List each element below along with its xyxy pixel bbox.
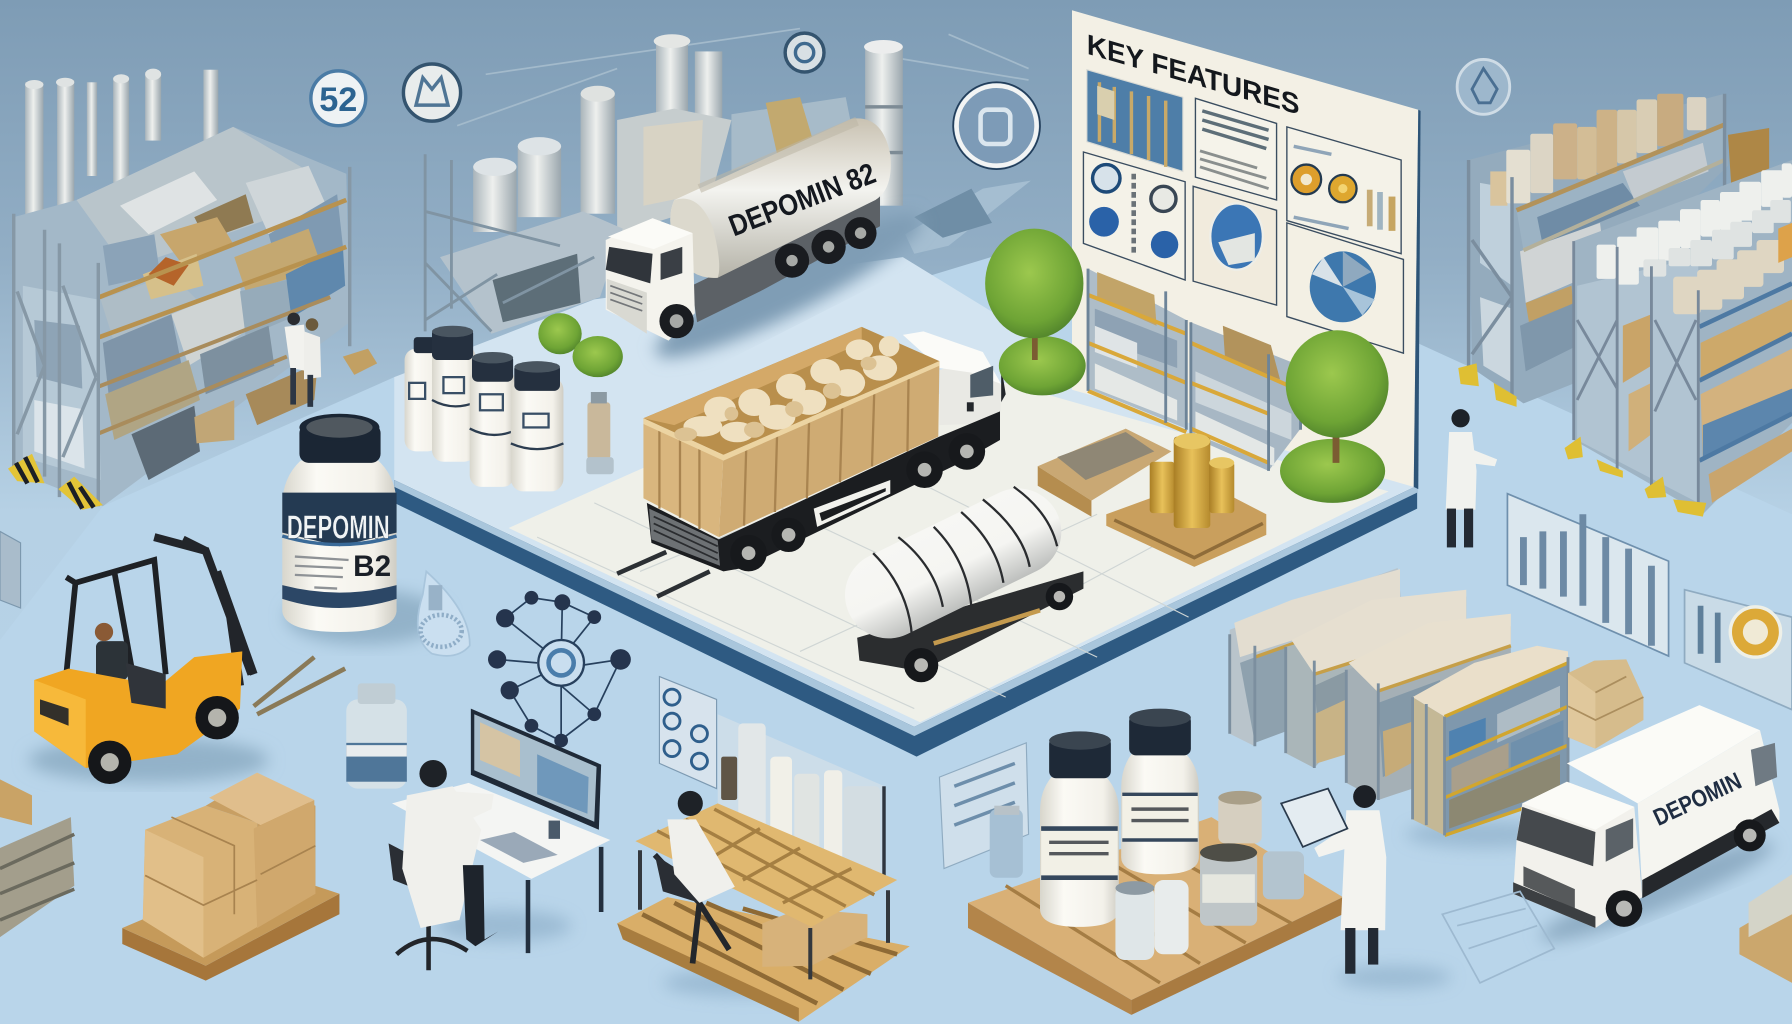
cage	[66, 560, 166, 686]
billboard heading: KEY FEATURES	[1087, 29, 1299, 122]
floor pallet	[617, 897, 910, 1022]
badge: emblem left	[403, 64, 461, 121]
shelf unit right	[1191, 322, 1301, 471]
bottle	[432, 326, 475, 462]
pallet	[968, 817, 1343, 1015]
truck cab	[903, 331, 1006, 425]
glass side panel with icons	[659, 677, 717, 789]
pallet	[122, 869, 339, 981]
small glass jar	[346, 683, 407, 789]
storage shelves	[1088, 269, 1301, 471]
workstation desk	[389, 709, 610, 970]
wheels	[659, 217, 877, 338]
floor surfaces	[0, 246, 1792, 1024]
large DEPOMIN B2 bottle	[282, 414, 446, 645]
small containers	[1115, 851, 1304, 960]
bottle variant: B2	[353, 550, 391, 583]
glass chart panel	[1507, 494, 1669, 656]
chassis	[647, 411, 1000, 571]
forklift	[29, 537, 345, 784]
vial	[586, 392, 614, 474]
white cylinders	[1597, 163, 1792, 285]
refinery towers	[425, 29, 1031, 334]
glass panel left edge	[0, 531, 21, 608]
badge: 52	[311, 71, 366, 126]
badge: large emblem	[953, 82, 1040, 169]
back rack	[1469, 94, 1769, 403]
rack 3	[1346, 614, 1511, 800]
green bush left	[538, 313, 623, 377]
tanker lettering: DEPOMIN 82	[724, 157, 880, 243]
bottle	[405, 337, 439, 451]
rack clutter	[23, 127, 345, 480]
small glass panel	[939, 743, 1029, 878]
scientists	[285, 313, 321, 407]
panel: text lines	[1195, 98, 1277, 200]
main truck with open cargo	[617, 327, 1006, 597]
network diagram	[488, 591, 631, 747]
large bottle	[1040, 731, 1119, 927]
cargo box	[643, 327, 939, 537]
tree right	[1280, 330, 1389, 503]
soft floor shadows	[434, 821, 1566, 997]
bundled sacks	[1673, 240, 1784, 314]
tank	[670, 118, 891, 278]
papers	[480, 832, 558, 863]
seated worker	[667, 791, 735, 903]
left edge stacked goods	[0, 779, 74, 937]
table top	[635, 803, 897, 979]
bottle cluster	[405, 326, 614, 491]
bottle label: DEPOMIN	[287, 509, 390, 546]
billboard: key features	[1072, 10, 1421, 489]
panel: plant photo	[1087, 70, 1183, 171]
upper right racks	[1458, 94, 1792, 517]
wheels	[1606, 819, 1766, 927]
white delivery van	[1513, 705, 1781, 955]
large bottle	[1121, 709, 1199, 874]
corner shelf bottom right	[1739, 874, 1792, 983]
crates	[343, 349, 377, 375]
right scientist	[1446, 409, 1497, 547]
hazard feet	[8, 454, 103, 510]
shelf unit left	[1088, 269, 1186, 432]
driver	[95, 623, 128, 680]
fork arms	[617, 552, 710, 597]
wheels	[88, 696, 239, 784]
bottle	[511, 361, 563, 491]
badge: 52: 52	[319, 81, 357, 119]
tree left	[985, 229, 1086, 395]
lower right translucent racks	[1230, 568, 1568, 835]
left industrial rack	[8, 69, 377, 510]
wheels	[730, 433, 985, 571]
monitor	[471, 709, 601, 839]
panel: circular photo	[1193, 186, 1277, 305]
chair	[655, 855, 729, 963]
hazard feet	[1458, 363, 1706, 517]
stacked cardboard boxes on pallet	[122, 773, 339, 981]
glass teardrop icon	[418, 571, 470, 656]
panel: pie photo	[1287, 223, 1403, 353]
forks	[254, 657, 345, 714]
mast	[154, 537, 254, 686]
truck cab	[606, 218, 695, 341]
cardboard boxes right	[1568, 659, 1643, 749]
gold barrels	[1150, 433, 1234, 528]
badge: top right emblem	[1457, 59, 1510, 114]
product bottles row	[718, 714, 886, 887]
wooden pallet with bottles	[968, 709, 1343, 1015]
front rack	[1574, 160, 1792, 514]
bottle	[470, 352, 514, 487]
panel: chart	[1287, 127, 1401, 254]
barrels	[1490, 94, 1706, 206]
faint floor sketch	[1442, 891, 1554, 983]
smokestacks	[25, 69, 218, 240]
van lettering: DEPOMIN	[1649, 768, 1746, 832]
white tank trailer	[830, 474, 1083, 682]
pallets with gold barrels	[1038, 429, 1266, 567]
rack 4	[1413, 646, 1568, 835]
cargo contents	[674, 336, 899, 442]
glass gauge panel	[1685, 590, 1792, 710]
rack 1	[1230, 568, 1403, 746]
badge: small emblem	[785, 33, 824, 72]
clipboard	[1281, 789, 1347, 847]
tanker truck	[606, 118, 933, 378]
body	[34, 651, 242, 768]
seated scientist	[402, 760, 498, 946]
pallet table with seated worker	[617, 791, 910, 1022]
standing scientist with clipboard	[1281, 785, 1386, 974]
rack 2	[1286, 590, 1466, 768]
box	[762, 909, 867, 967]
jar	[1218, 791, 1262, 843]
chair	[389, 843, 467, 970]
paint can	[1200, 843, 1257, 926]
panel: icons	[1083, 152, 1185, 280]
